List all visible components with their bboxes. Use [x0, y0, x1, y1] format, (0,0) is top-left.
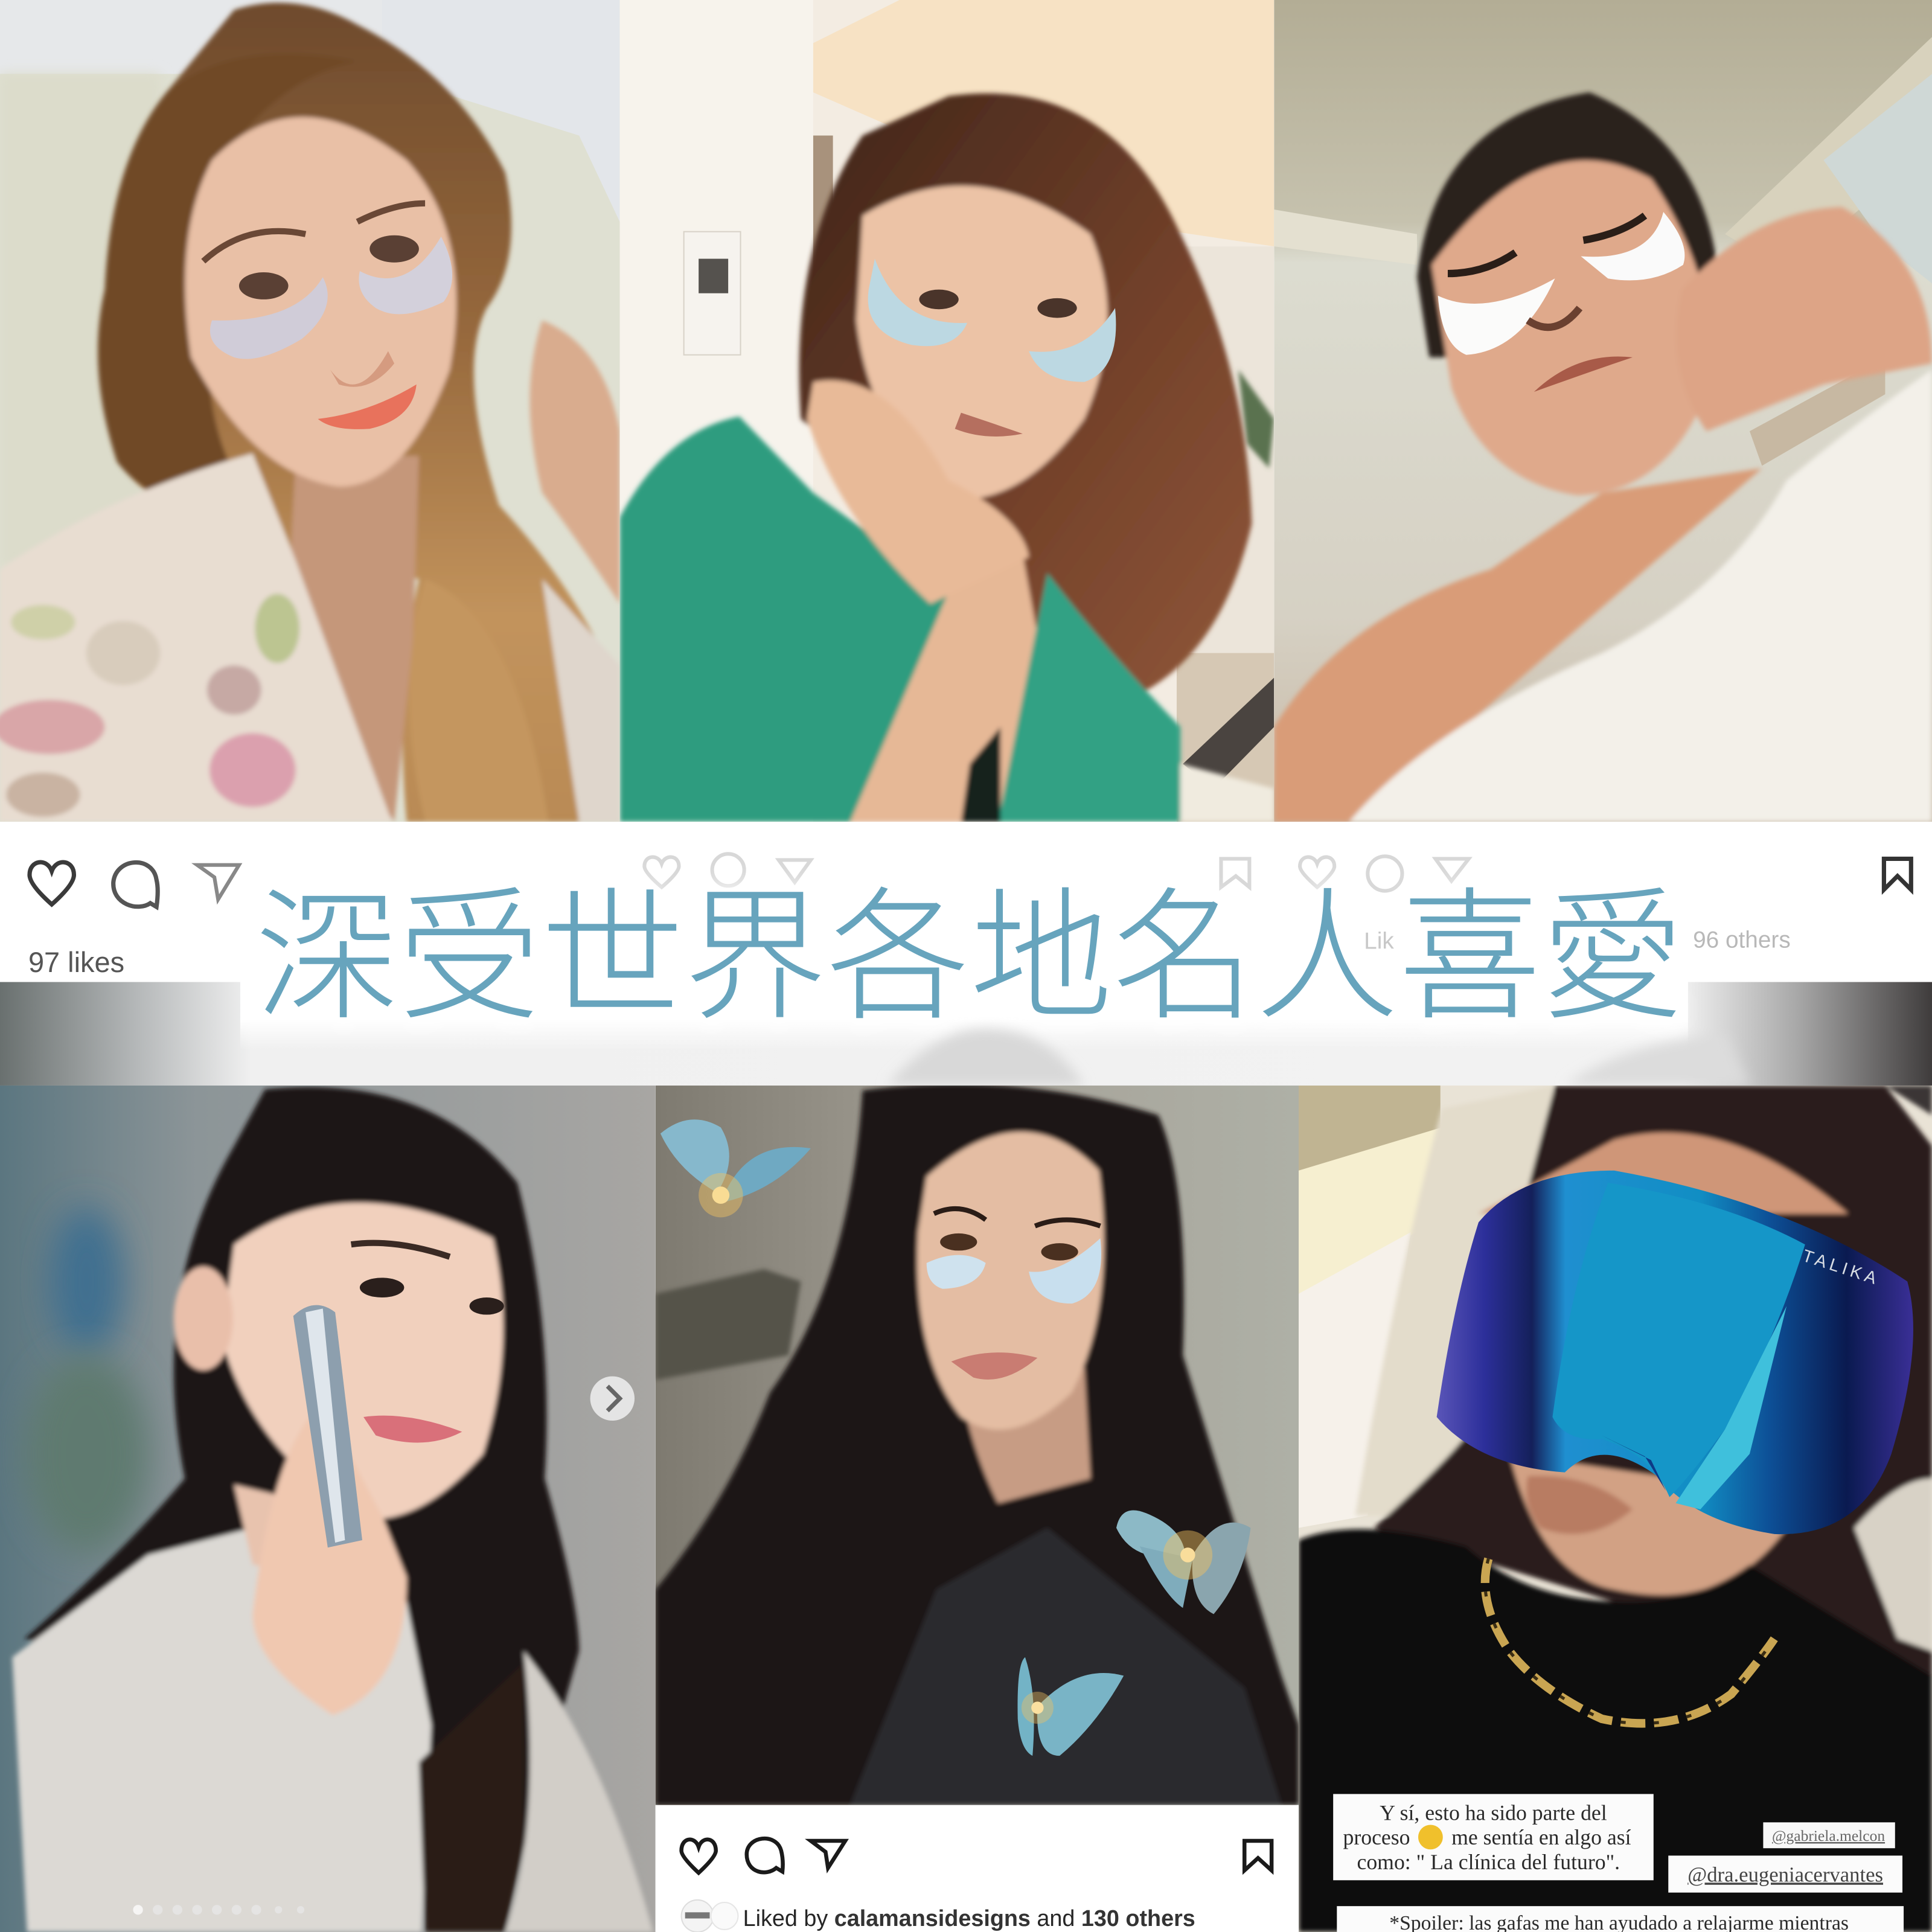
icon: heart	[30, 862, 74, 904]
gold chain necklace	[1485, 1559, 1774, 1723]
serum tube	[293, 1305, 362, 1547]
carousel arrow	[590, 1377, 635, 1421]
social strip with action icons	[0, 822, 1932, 982]
faded transition band	[0, 982, 1932, 1086]
icon: bookmark	[1884, 859, 1911, 889]
icon: heart	[682, 1840, 716, 1873]
story caption box: proceso	[1343, 1825, 1410, 1849]
photo: woman applying eye serum tube	[0, 1086, 656, 1932]
photo: woman in white bedding with eye patches	[1274, 0, 1932, 822]
photo: woman wearing blue mirrored visor	[1299, 1086, 1932, 1932]
instagram action panel	[656, 1805, 1299, 1932]
icon: bookmark	[1244, 1841, 1271, 1870]
story tag: eugenia	[1668, 1855, 1902, 1893]
carousel dots	[133, 1905, 304, 1914]
brand mark on visor: TALIKA	[1800, 1246, 1882, 1290]
faint icons	[644, 854, 1469, 891]
avatars	[682, 1900, 738, 1932]
icon: send	[811, 1841, 845, 1868]
title glow: 深受世界各地名人喜愛	[255, 841, 1684, 1048]
faint like text: Lik	[1364, 928, 1394, 954]
faint others text: 96 others	[1693, 927, 1791, 953]
story caption box: me sentía en algo así	[1451, 1825, 1631, 1849]
eye patches	[203, 203, 452, 429]
story tag: gabriela	[1763, 1822, 1895, 1848]
eye patches	[1438, 212, 1684, 392]
photo: woman in floral robe with eye patches	[0, 0, 619, 822]
mirrored visor	[1437, 1171, 1913, 1534]
story spoiler box	[1337, 1906, 1904, 1932]
icon: comment	[114, 862, 158, 907]
icon: send	[197, 865, 239, 900]
facial features	[351, 1243, 504, 1442]
butterfly bottom	[1017, 1657, 1124, 1756]
butterfly top left	[661, 1119, 811, 1217]
story caption box	[1333, 1794, 1654, 1880]
title: 深受世界各地名人喜愛	[255, 841, 1684, 1048]
story tag: eugenia: @dra.eugeniacervantes	[1687, 1863, 1883, 1886]
story caption box: como: " La clínica del futuro".	[1357, 1850, 1620, 1874]
story caption box: Y sí, esto ha sido parte del	[1380, 1800, 1607, 1825]
story tag: gabriela: @gabriela.melcon	[1772, 1827, 1885, 1844]
liked by text: Liked by calamansidesigns and 130 others	[743, 1905, 1195, 1931]
icon: comment	[747, 1838, 783, 1872]
likes count: 97 likes	[28, 947, 124, 978]
photo: woman with butterflies and eye patches	[656, 1086, 1299, 1805]
eye patches	[868, 259, 1116, 437]
wall switch	[684, 232, 741, 355]
butterfly right	[1116, 1510, 1250, 1614]
photo: woman in green cardigan resting chin on hand	[619, 0, 1274, 822]
eye patches	[927, 1209, 1101, 1380]
